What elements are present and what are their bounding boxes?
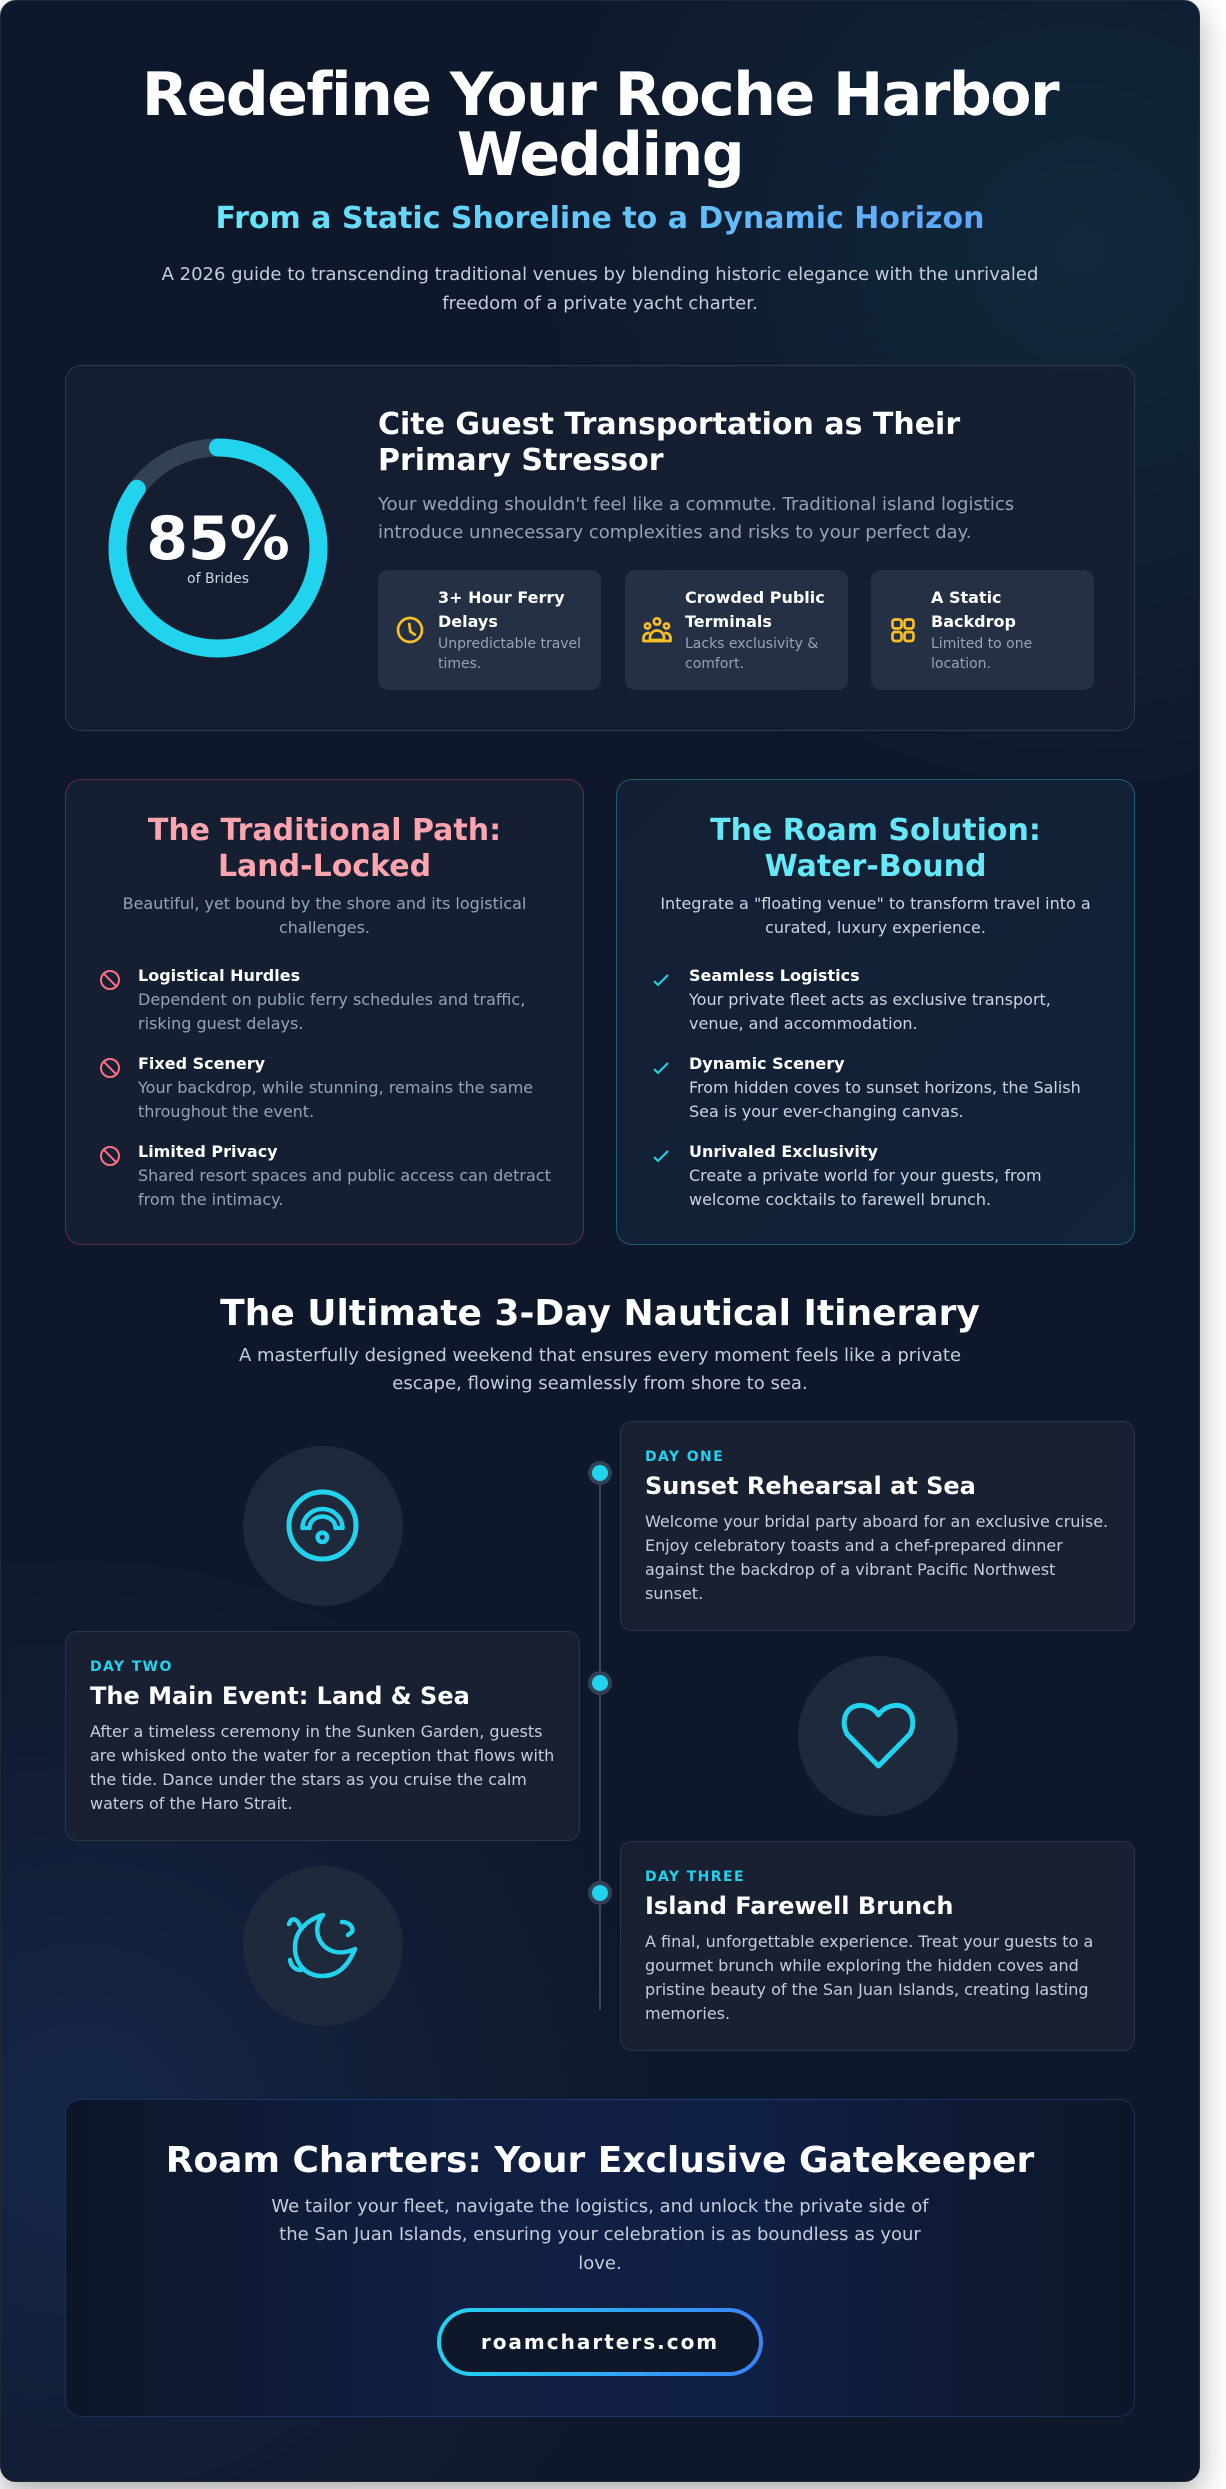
stat card: ferry delays: Delays bbox=[438, 612, 498, 631]
list item: fixed scenery: throughout the event. bbox=[138, 1102, 314, 1121]
icon: ban bbox=[100, 970, 120, 990]
intro text: A 2026 guide to transcending traditional venues by blending historic elegance with the unrivaled bbox=[162, 264, 1038, 285]
stat card: static backdrop bbox=[871, 570, 1094, 690]
list item: seamless logistics: venue, and accommodation. bbox=[689, 1014, 918, 1033]
stat card: ferry delays: Unpredictable travel bbox=[438, 636, 581, 652]
timeline dot: day three bbox=[588, 1881, 612, 1905]
panel: roam solution bbox=[616, 779, 1135, 1245]
day text: gourmet brunch while exploring the hidden coves and bbox=[645, 1956, 1079, 1975]
lead text: Integrate a "floating venue" to transform travel into a bbox=[660, 894, 1091, 913]
list item: fixed scenery: Fixed Scenery bbox=[138, 1054, 265, 1073]
day text bbox=[645, 1512, 1108, 1603]
lead text: Beautiful, yet bound by the shore and its logistical bbox=[123, 894, 526, 913]
list item: dynamic scenery bbox=[653, 1054, 1081, 1121]
list item: limited privacy bbox=[100, 1142, 551, 1209]
list item: unrivaled exclusivity: Create a private world for your guests, from bbox=[689, 1166, 1042, 1185]
day text bbox=[90, 1722, 554, 1813]
subtitle: From a Static Shoreline to a Dynamic Horizon bbox=[216, 201, 984, 236]
day label: DAY THREE bbox=[645, 1869, 745, 1885]
list item: seamless logistics bbox=[653, 966, 1051, 1033]
cta text bbox=[271, 2196, 929, 2274]
day text bbox=[645, 1932, 1093, 2023]
donut chart: 85%: of Brides bbox=[187, 571, 249, 587]
day text: against the backdrop of a vibrant Pacific Northwest bbox=[645, 1560, 1055, 1579]
cta text: We tailor your fleet, navigate the logistics, and unlock the private side of bbox=[271, 2196, 929, 2217]
description: Your wedding shouldn't feel like a commute. Traditional island logistics bbox=[378, 494, 1014, 515]
icon: check bbox=[653, 1062, 669, 1074]
description bbox=[378, 494, 1014, 543]
day text: memories. bbox=[645, 2004, 730, 2023]
stat card: ferry delays: times. bbox=[438, 656, 481, 672]
website button bbox=[437, 2308, 763, 2376]
icon: grid bbox=[891, 618, 915, 642]
lead text bbox=[660, 894, 1091, 937]
lead text: challenges. bbox=[279, 918, 370, 937]
stat card: crowded terminals: Lacks exclusivity & bbox=[685, 636, 818, 652]
description: introduce unnecessary complexities and risks to your perfect day. bbox=[378, 522, 971, 543]
lead text bbox=[123, 894, 526, 937]
heading: Cite Guest Transportation as Their bbox=[378, 407, 960, 442]
stat card: static backdrop: A Static bbox=[931, 588, 1002, 607]
heading bbox=[710, 813, 1041, 884]
list item: unrivaled exclusivity: Unrivaled Exclusivity bbox=[689, 1142, 878, 1161]
heading: The Roam Solution: bbox=[710, 813, 1041, 848]
panel: guest transportation stressor bbox=[65, 365, 1135, 731]
donut chart: 85% bbox=[108, 438, 328, 658]
cta text: the San Juan Islands, ensuring your celebration is as boundless as your bbox=[279, 2224, 921, 2245]
list item: seamless logistics: Your private fleet acts as exclusive transport, bbox=[689, 990, 1051, 1009]
list item: logistical hurdles bbox=[100, 966, 525, 1033]
timeline dot: day one bbox=[588, 1461, 612, 1485]
day text: Welcome your bridal party aboard for an exclusive cruise. bbox=[645, 1512, 1108, 1531]
list item: dynamic scenery: Dynamic Scenery bbox=[689, 1054, 845, 1073]
title: Wedding bbox=[457, 120, 743, 190]
stat card: crowded terminals: Terminals bbox=[685, 612, 772, 631]
day three card bbox=[620, 1841, 1135, 2051]
day heading: Sunset Rehearsal at Sea bbox=[645, 1472, 976, 1500]
heading bbox=[378, 407, 960, 478]
title bbox=[142, 60, 1060, 190]
stat card: ferry delays: 3+ Hour Ferry bbox=[438, 588, 565, 607]
day text: After a timeless ceremony in the Sunken Garden, guests bbox=[90, 1722, 542, 1741]
day text: A final, unforgettable experience. Treat your guests to a bbox=[645, 1932, 1093, 1951]
lead text: curated, luxury experience. bbox=[765, 918, 986, 937]
icon: moon circle bbox=[243, 1866, 403, 2026]
day text: waters of the Haro Strait. bbox=[90, 1794, 292, 1813]
list item: unrivaled exclusivity: welcome cocktails to farewell brunch. bbox=[689, 1190, 991, 1209]
intro text: freedom of a private yacht charter. bbox=[442, 293, 758, 314]
cta text: love. bbox=[578, 2253, 622, 2274]
icon: ban bbox=[100, 1146, 120, 1166]
stat card: static backdrop: location. bbox=[931, 656, 991, 672]
list item: logistical hurdles: risking guest delays. bbox=[138, 1014, 303, 1033]
list item: fixed scenery bbox=[100, 1054, 533, 1121]
call to action panel bbox=[65, 2099, 1135, 2417]
heading: Water-Bound bbox=[765, 849, 986, 884]
heading: The Traditional Path: bbox=[148, 813, 501, 848]
icon: people bbox=[642, 617, 672, 642]
donut chart: 85%: 85% bbox=[146, 504, 290, 574]
day text: sunset. bbox=[645, 1584, 703, 1603]
itinerary intro: A masterfully designed weekend that ensures every moment feels like a private bbox=[239, 1345, 961, 1366]
list item: limited privacy: from the intimacy. bbox=[138, 1190, 283, 1209]
stat card: static backdrop: Backdrop bbox=[931, 612, 1016, 631]
icon: clock bbox=[396, 616, 424, 644]
list item: limited privacy: Shared resort spaces and public access can detract bbox=[138, 1166, 551, 1185]
list item: fixed scenery: Your backdrop, while stunning, remains the same bbox=[138, 1078, 533, 1097]
title: Redefine Your Roche Harbor bbox=[142, 60, 1058, 130]
timeline dot: day two bbox=[588, 1671, 612, 1695]
day text: are whisked onto the water for a reception that flows with bbox=[90, 1746, 554, 1765]
list item: logistical hurdles: Logistical Hurdles bbox=[138, 966, 300, 985]
panel: traditional path bbox=[65, 779, 584, 1245]
itinerary intro bbox=[239, 1345, 961, 1394]
stat card: static backdrop: Limited to one bbox=[931, 636, 1032, 652]
day heading: Island Farewell Brunch bbox=[645, 1892, 953, 1920]
icon: compass/signal circle bbox=[243, 1446, 403, 1606]
list item: unrivaled exclusivity bbox=[653, 1142, 1042, 1209]
itinerary intro: escape, flowing seamlessly from shore to sea. bbox=[392, 1373, 808, 1394]
heading: Primary Stressor bbox=[378, 443, 664, 478]
day one card bbox=[620, 1421, 1135, 1631]
icon: check bbox=[653, 1150, 669, 1162]
day label: DAY ONE bbox=[645, 1449, 724, 1465]
icon: heart circle bbox=[798, 1656, 958, 1816]
stat card: crowded terminals: comfort. bbox=[685, 656, 744, 672]
heading bbox=[148, 813, 501, 884]
timeline line bbox=[599, 1473, 601, 2010]
intro text bbox=[162, 264, 1038, 314]
icon: ban bbox=[100, 1058, 120, 1078]
cta heading: Roam Charters: Your Exclusive Gatekeeper bbox=[166, 2140, 1034, 2181]
stat card: crowded terminals bbox=[625, 570, 848, 690]
day text: Enjoy celebratory toasts and a chef-prepared dinner bbox=[645, 1536, 1063, 1555]
day two card bbox=[65, 1631, 580, 1841]
day text: the tide. Dance under the stars as you cruise the calm bbox=[90, 1770, 527, 1789]
list item: seamless logistics: Seamless Logistics bbox=[689, 966, 860, 985]
list item: logistical hurdles: Dependent on public ferry schedules and traffic, bbox=[138, 990, 525, 1009]
stat card: ferry delays bbox=[378, 570, 601, 690]
list item: dynamic scenery: From hidden coves to sunset horizons, the Salish bbox=[689, 1078, 1081, 1097]
website button: roamcharters.com bbox=[481, 2330, 719, 2354]
day label: DAY TWO bbox=[90, 1659, 173, 1675]
list item: limited privacy: Limited Privacy bbox=[138, 1142, 278, 1161]
itinerary heading: The Ultimate 3-Day Nautical Itinerary bbox=[220, 1293, 980, 1334]
list item: dynamic scenery: Sea is your ever-changing canvas. bbox=[689, 1102, 964, 1121]
day heading: The Main Event: Land & Sea bbox=[90, 1682, 470, 1710]
heading: Land-Locked bbox=[218, 849, 431, 884]
stat card: crowded terminals: Crowded Public bbox=[685, 588, 825, 607]
day text: pristine beauty of the San Juan Islands, creating lasting bbox=[645, 1980, 1088, 1999]
icon: check bbox=[653, 974, 669, 986]
